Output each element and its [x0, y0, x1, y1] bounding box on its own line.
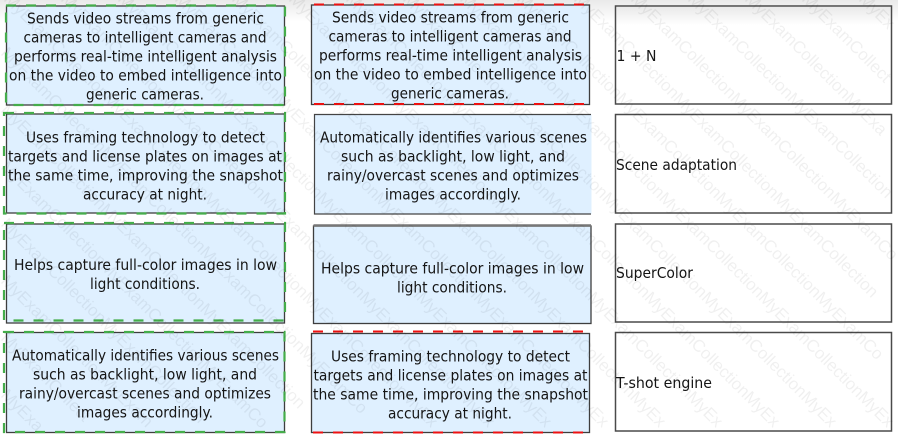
panel: left column of answer boxes — [4, 6, 285, 432]
answer box: scene identification (green): Automatically identifies various scenes — [12, 347, 279, 365]
watermark: diagonal MyExamCollection text: MyExamCollectionMyExamCollection — [0, 214, 210, 427]
watermark: diagonal MyExamCollection text: MyExamCollectionMyExamCollectionMyExamCollectionMyExamCollectionMyEx — [171, 0, 613, 431]
answer box: framing technology (red): the same time, improving the snapshot — [313, 386, 588, 404]
answer box: sends video streams (green): Sends video streams from generic — [27, 10, 264, 28]
watermark: diagonal MyExamCollection text: MyExamCollectionMyExamCollectionMyExamCollectionMyExamCo — [0, 43, 371, 418]
answer box: framing technology (red): targets and license plates on images at — [314, 367, 588, 385]
answer box: scene identification (green) — [4, 332, 284, 432]
answer box: scene identification — [314, 114, 592, 214]
watermark: diagonal MyExamCollection text: MyExamCollectionMyExamCollectionMyExamCollectionMyExamCollectionMyEx — [114, 0, 556, 431]
answer box: sends video streams (red): on the video to embed intelligence into — [314, 66, 587, 84]
watermark: diagonal MyExamCollection text: MyExamCollectionMyExamCollectionMyExamCollectionMyExamCollectionMyEx — [57, 0, 499, 431]
term box: SuperColor — [616, 224, 892, 322]
term box: SuperColor: SuperColor — [616, 264, 694, 282]
watermark: diagonal MyExamCollection text: MyExamCollectionMyExamCollectionMyExamCollectionMyExamCollectionMyEx — [456, 0, 898, 431]
watermark: diagonal MyExamCollection text: MyExamCollectionMyExamCollectionMyExamCollectionMyExamCollectionMyEx — [342, 0, 784, 431]
watermark: diagonal MyExamCollection text: MyExamCollectionMyExam — [0, 271, 157, 431]
background: top grey fade — [0, 0, 898, 22]
answer box: scene identification (green): images accordingly. — [77, 404, 213, 422]
answer box: full-color capture (green): Helps capture full-color images in low — [14, 256, 277, 274]
answer box: sends video streams (red): Sends video streams from generic — [332, 9, 569, 27]
term box: Scene adaptation: Scene adaptation — [616, 156, 737, 174]
answer box: scene identification: Automatically identifies various scenes — [320, 129, 587, 147]
answer box: scene identification: images accordingly. — [385, 186, 521, 204]
answer box: framing technology (red): Uses framing technology to detect — [331, 348, 570, 366]
answer box: sends video streams (red): cameras to intelligent cameras and — [328, 28, 572, 46]
answer box: full-color capture (green): light conditions. — [90, 275, 200, 293]
watermark: diagonal MyExamCollection text: MyExamCollectionMyExamCollectionMyExamCollection — [0, 100, 309, 412]
answer box: scene identification (green): such as backlight, low light, and — [33, 366, 257, 384]
answer box: framing technology (green): the same time, improving the snapshot — [8, 167, 283, 185]
term box: Scene adaptation — [616, 114, 892, 213]
answer box: framing technology (red): accuracy at night. — [388, 405, 512, 423]
watermark: diagonal MyExamCollection text: MyExamCollectionMyExamCollectionMyExamCollectionMyExamCo — [513, 0, 887, 364]
answer box: framing technology (green): Uses framing technology to detect — [26, 129, 265, 147]
answer box: full-color capture (green) — [4, 223, 285, 323]
answer box: sends video streams (green) — [6, 6, 285, 105]
answer box: framing technology (green): targets and license plates on images at — [8, 148, 282, 166]
term box: T-shot engine: T-shot engine — [615, 374, 712, 392]
watermark: diagonal MyExamCollection text: MyExamCollectionMyExamCollectionMyExamCollectionMyExamCollectionMyEx — [228, 0, 670, 431]
answer box: full-color capture — [314, 226, 591, 324]
answer box: sends video streams (green): cameras to intelligent cameras and — [24, 28, 266, 46]
watermark: diagonal MyExamCollection text: MyExamCollectionMyExamCollectionMyExamCo — [0, 157, 272, 432]
answer box: framing technology (green) — [4, 113, 285, 214]
watermark: diagonal MyExamCollection text: MyExamCollect — [0, 328, 94, 426]
panel: right column of term boxes — [615, 6, 892, 431]
answer box: full-color capture: Helps capture full-color images in low — [321, 259, 584, 277]
answer box: sends video streams (red) — [312, 4, 590, 104]
answer box: sends video streams (red): generic cameras. — [391, 85, 509, 103]
answer box: sends video streams (green): performs real-time intelligent analysis — [14, 48, 277, 66]
answer box: scene identification (green): rainy/overcast scenes and optimizes — [19, 385, 271, 403]
answer box: scene identification: rainy/overcast scenes and optimizes — [327, 167, 579, 185]
answer box: sends video streams (green): on the video to embed intelligence into — [9, 66, 282, 84]
answer box: sends video streams (green): generic cameras. — [86, 86, 204, 104]
panel: middle column of answer boxes — [312, 4, 592, 432]
watermark: diagonal MyExamCollection text: MyExamCollectionMyExamCollectionMyExamCollectionMyExamCollectionMyEx — [285, 0, 727, 431]
watermark: diagonal MyExamCollection text: MyExamCollectionMyExamCollectionMyExamCollectionMyExamCollectionMyEx — [399, 0, 841, 431]
term box: T-shot engine — [615, 332, 892, 431]
watermark: diagonal MyExamCollection text: MyExamCollectionMyExamCollectionMyExamCollectionMyExamCollectionMyEx — [0, 0, 442, 431]
term box: 1 + N — [616, 6, 892, 104]
term box: 1 + N: 1 + N — [616, 47, 656, 65]
answer box: framing technology (red) — [312, 332, 590, 432]
answer box: framing technology (green): accuracy at night. — [83, 186, 207, 204]
answer box: scene identification: such as backlight, low light, and — [341, 148, 565, 166]
answer box: full-color capture: light conditions. — [397, 278, 507, 296]
answer box: sends video streams (red): performs real-time intelligent analysis — [319, 47, 582, 65]
